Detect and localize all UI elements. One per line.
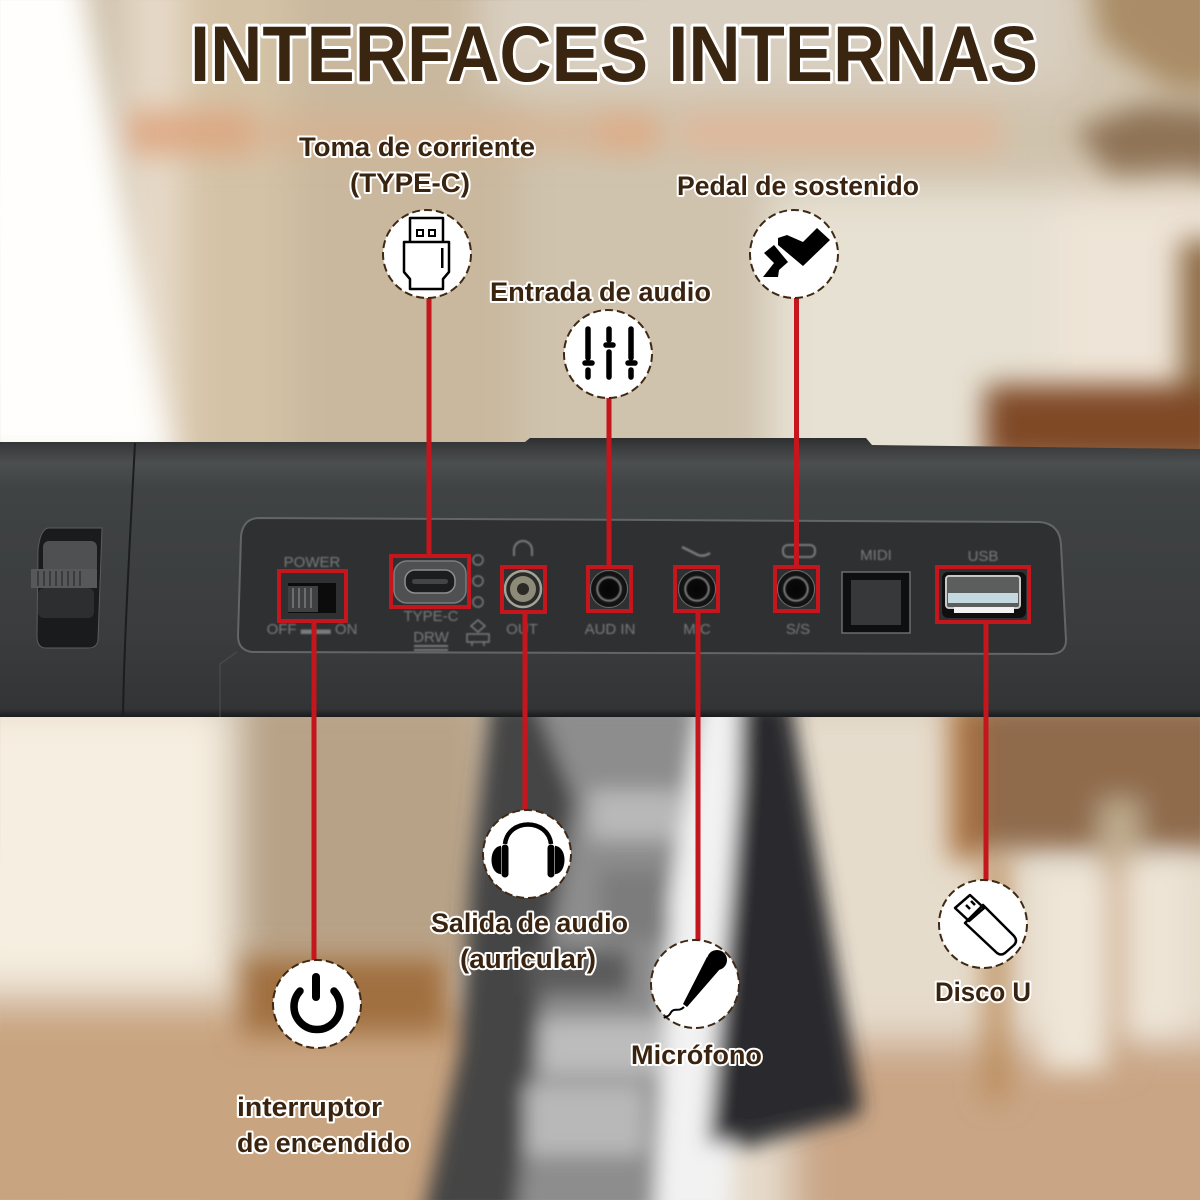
microphone jack (678, 570, 716, 608)
connector panel (238, 518, 1066, 654)
label: Salida de audio: (auricular) (460, 944, 596, 974)
panel markings: MIDI (860, 547, 892, 564)
red port highlight boxes (279, 556, 1029, 622)
panel markings: USB (968, 548, 998, 565)
label: Pedal de sostenido: Pedal de sostenido (677, 171, 919, 201)
label: Micrófono: Micrófono (631, 1040, 762, 1070)
label: interruptor de encendido: de encendido (237, 1128, 410, 1158)
audio input jack (590, 570, 628, 608)
icon: power symbol (273, 960, 361, 1048)
panel markings: TYPE-C (403, 608, 459, 625)
icon: microphone (651, 940, 739, 1028)
label: Salida de audio: Salida de audio (431, 908, 628, 938)
label: Toma de corriente: Toma de corriente (299, 132, 535, 162)
label: Toma de corriente: (TYPE-C) (350, 168, 470, 198)
sustain jack (777, 570, 815, 608)
panel markings: POWER (284, 554, 340, 571)
label: Entrada de audio: Entrada de audio (490, 277, 711, 307)
label: Toma de corriente (299, 132, 535, 198)
panel markings: DRW (413, 629, 450, 646)
panel markings: MIC (683, 621, 711, 638)
power switch (288, 583, 336, 613)
headphone jack (505, 571, 541, 607)
side slot and sliding latch (31, 528, 102, 648)
icon: audio sliders (564, 310, 652, 398)
red connector lines (312, 296, 988, 962)
USB-A port (942, 572, 1026, 618)
icon: foot pedal (750, 210, 838, 298)
panel markings: AUD IN (585, 621, 635, 638)
panel markings: OUT (506, 621, 538, 638)
icon: USB drive (939, 880, 1027, 968)
USB-C port (394, 561, 466, 603)
label: Salida de audio (431, 908, 628, 974)
label: interruptor de encendido: interruptor (237, 1092, 383, 1122)
MIDI port (842, 572, 910, 633)
icon: USB-C plug (383, 210, 471, 298)
panel markings: S/S (786, 621, 810, 638)
panel markings (267, 541, 998, 651)
icon: headphones (483, 810, 571, 898)
keyboard body (0, 438, 1200, 717)
panel markings: OFF ▬▬ ON (267, 621, 357, 638)
label: interruptor de encendido (237, 1092, 410, 1158)
label: Disco U: Disco U (935, 977, 1031, 1007)
title: INTERFACES INTERNAS (190, 9, 1038, 98)
